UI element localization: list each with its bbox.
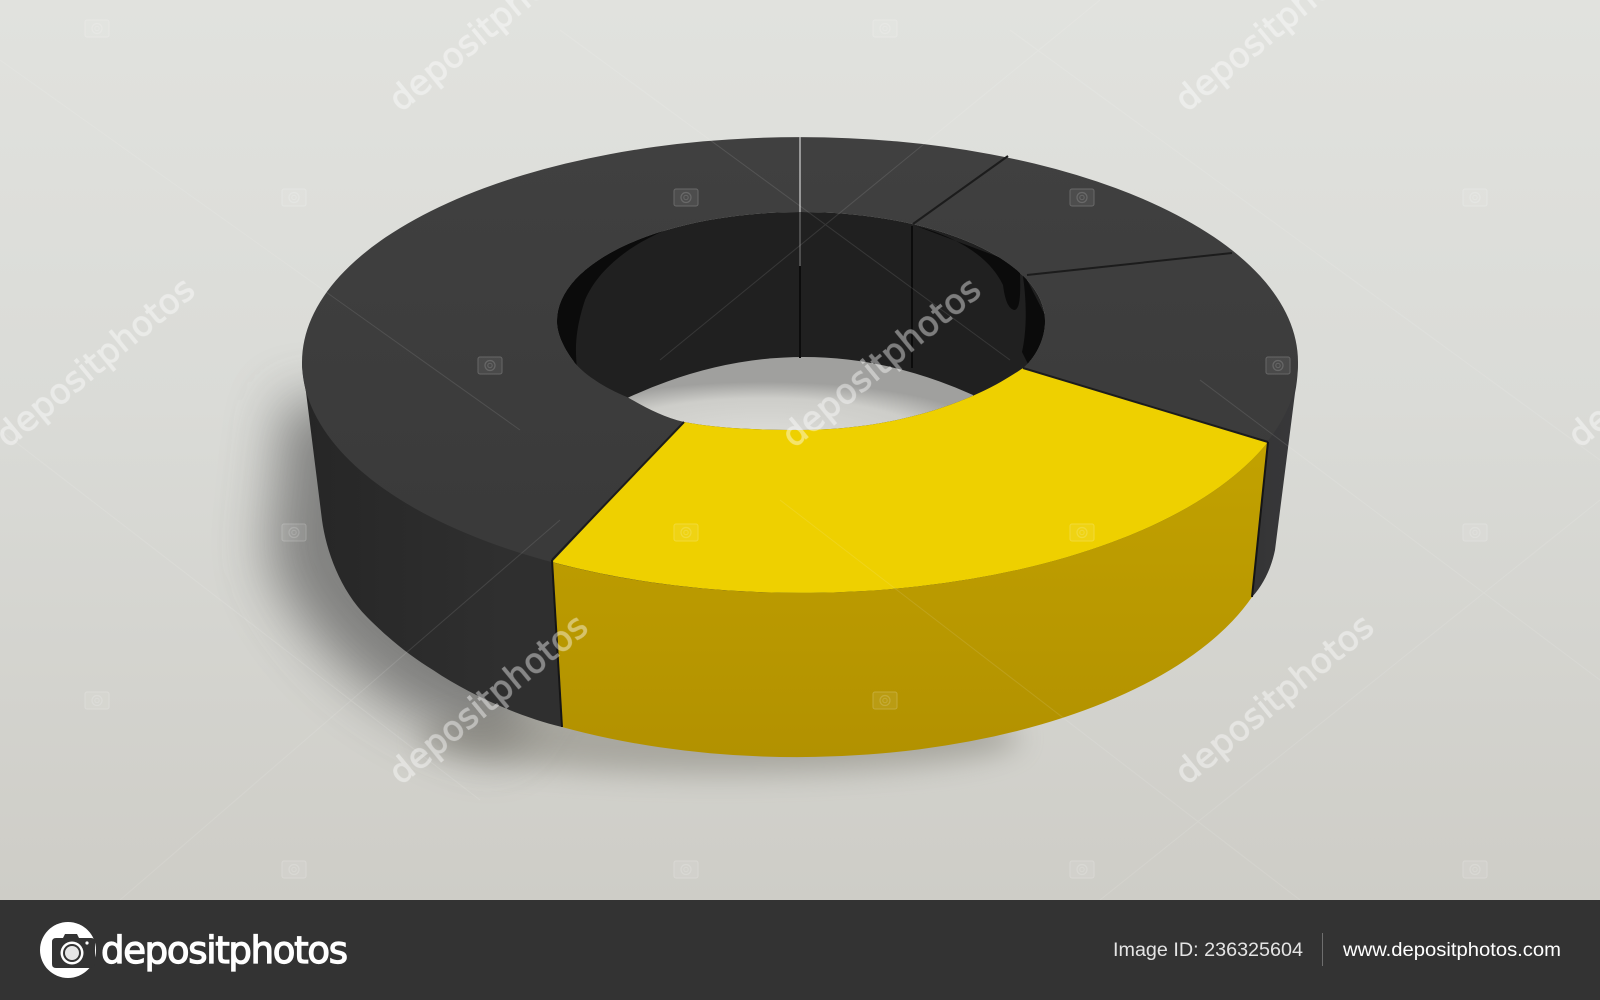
ground shadow (268, 400, 1020, 774)
3D ring chart (302, 137, 1298, 757)
yellow segment top surface (552, 368, 1268, 593)
icon: camera logo (40, 922, 96, 978)
depositphotos diagonal watermarks (0, 0, 1600, 793)
hole inner wall (557, 212, 1045, 430)
inner wall seam lines (800, 212, 912, 368)
depositphotos diagonal watermarks: depositphotos (774, 269, 989, 456)
website url: www.depositphotos.com (1342, 939, 1561, 961)
segment dividers (552, 137, 1268, 727)
black ring top surface (302, 137, 1298, 593)
glossy reflection far right (1022, 276, 1045, 364)
depositphotos diagonal watermarks: depositphotos (1167, 606, 1382, 793)
glossy reflection left (557, 230, 664, 364)
yellow segment side wall (552, 442, 1268, 757)
image id: Image ID: 236325604 (1113, 939, 1303, 961)
small camera watermarks (85, 20, 1487, 878)
hole floor (628, 357, 973, 430)
logo wordmark: depositphotos (101, 929, 348, 972)
depositphotos diagonal watermarks: depositphotos (381, 606, 596, 793)
footer bar (0, 900, 1600, 1000)
glossy reflection right (916, 226, 1020, 310)
black ring outer side wall (302, 362, 1298, 727)
